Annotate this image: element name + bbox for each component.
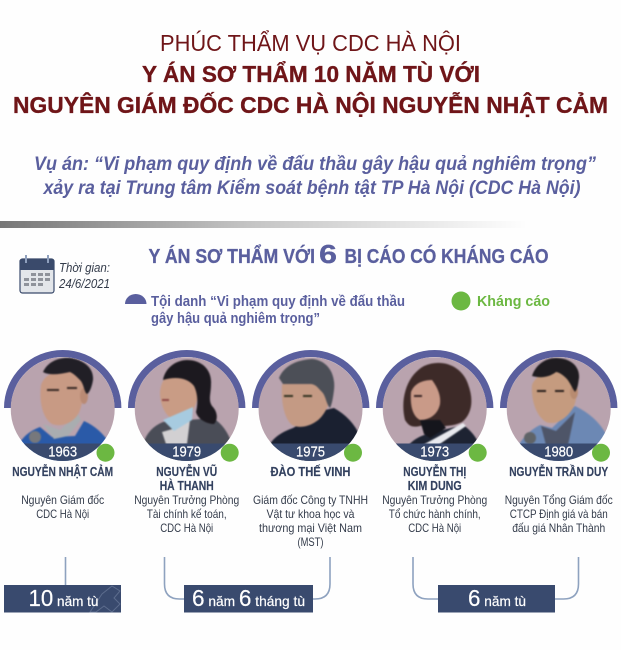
person 5 [500,350,617,535]
person 4 [376,350,493,535]
role 3: (MST) [298,535,324,549]
name 1: NGUYỄN NHẬT CẢM [12,464,113,479]
date: Thời gian: [59,261,110,275]
sentence box 1: 10 năm tù [28,585,98,611]
name 2: NGUYỄN VŨ [156,464,217,479]
appeal marker 4 [469,444,487,462]
connector: sentence 1 [64,557,66,585]
role 4 [382,493,487,535]
arc 3 [252,350,369,408]
date: 24/6/2021 [58,277,110,291]
role 3: thương mại Việt Nam [259,521,362,535]
person 3 [252,350,369,549]
sentence box 3: 6 năm tù [468,585,526,611]
role 1: Nguyên Giám đốc [21,493,104,507]
birth year 1: 1963 [48,444,77,460]
legend: charge: gây hậu quả nghiêm trọng” [151,310,320,327]
year band 1 [24,444,102,461]
appeal marker 1 [96,444,114,462]
sentence box 2: 6 năm 6 tháng tù [192,585,305,611]
portrait 5 [506,357,612,462]
legend: charge: Tội danh “Vi phạm quy định về đấu thầu [151,293,405,310]
role 4: Tổ chức hành chính, [389,507,481,521]
section heading: BỊ CÁO CÓ KHÁNG CÁO [344,244,548,268]
birth year 5: 1980 [544,444,573,460]
title [13,29,608,118]
role 1: CDC Hà Nội [36,507,89,521]
role 5: đấu giá Nhân Thành [512,521,605,535]
arc 4 [376,350,493,408]
date [58,261,110,291]
title: PHÚC THẨM VỤ CDC HÀ NỘI [160,29,461,56]
birth year 2: 1979 [172,444,201,460]
arc 1 [4,350,121,408]
section heading: 6 [319,239,337,269]
role 2: CDC Hà Nội [160,521,213,535]
role 5 [505,493,613,535]
portrait 4 [382,357,488,462]
case description: xảy ra tại Trung tâm Kiểm soát bệnh tật TP Hà Nội (CDC Hà Nội) [43,178,580,199]
section heading [148,239,548,269]
title: Y ÁN SƠ THẨM 10 NĂM TÙ VỚI [142,60,480,87]
arc 5 [500,350,617,408]
role 2: Nguyên Trưởng Phòng [134,493,239,507]
role 3 [253,493,368,549]
role 1 [21,493,104,521]
name 4 [403,464,466,493]
year band 5 [520,444,598,461]
icon: calendar [20,255,54,293]
portrait 2 [134,357,240,462]
year band 3 [272,444,350,461]
year band 4 [396,444,474,461]
connector: sentence 2 [164,557,330,599]
role 4: Nguyên Trưởng Phòng [382,493,487,507]
portrait 1 [10,357,116,462]
person 1 [4,350,121,521]
sentence box 1 [4,585,121,612]
name 2 [156,464,217,493]
legend: appeal [452,292,550,310]
role 2: Tài chính kế toán, [147,507,227,521]
birth year 3: 1975 [296,444,325,460]
name 4: NGUYỄN THỊ [403,464,466,479]
role 2 [134,493,239,535]
birth year 4: 1973 [420,444,449,460]
name 3: ĐÀO THẾ VINH [270,464,350,479]
legend: appeal: Kháng cáo [477,293,550,310]
year band 2 [148,444,226,461]
appeal marker 2 [221,444,239,462]
name 4: KIM DUNG [408,479,462,493]
person 2 [128,350,245,535]
case description: Vụ án: “Vi phạm quy định về đấu thầu gây hậu quả nghiêm trọng” [34,154,596,175]
role 4: CDC Hà Nội [408,521,461,535]
role 3: Giám đốc Công ty TNHH [253,493,368,507]
appeal marker 3 [344,444,362,462]
connector: sentence 3 [413,557,578,599]
case description [34,154,596,199]
arc 2 [128,350,245,408]
role 3: Vật tư khoa học và [266,507,355,521]
name 2: HÀ THANH [160,478,214,493]
legend: charge [125,293,405,327]
portrait 3 [258,357,364,462]
sentence box 3 [438,585,555,612]
appeal marker 5 [592,444,610,462]
section heading: Y ÁN SƠ THẨM VỚI [148,244,315,268]
title: NGUYÊN GIÁM ĐỐC CDC HÀ NỘI NGUYỄN NHẬT CẢM [13,90,608,118]
